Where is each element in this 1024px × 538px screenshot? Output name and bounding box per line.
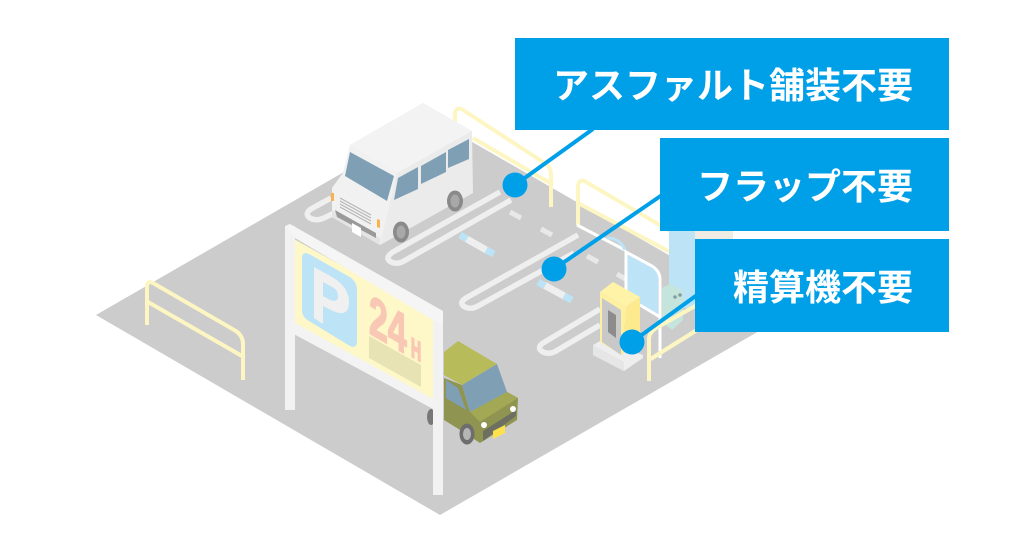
parking space lines — [307, 192, 600, 353]
leader: asphalt — [502, 129, 593, 198]
callout: no flap: フラップ不要 — [697, 166, 913, 207]
car front wheel — [460, 424, 474, 444]
sign info plate — [369, 336, 421, 387]
callout: no asphalt paving: アスファルト舗装不要 — [553, 65, 913, 106]
parking markers — [510, 212, 627, 280]
van windshield — [345, 152, 394, 201]
leader: flap — [542, 195, 662, 282]
rear railing left — [455, 109, 551, 207]
wheel stop lower — [538, 282, 572, 300]
callout leader lines and dots — [502, 129, 697, 354]
sign text: 24H: H — [411, 332, 421, 368]
parking P icon — [302, 253, 357, 347]
sign posts and frame — [285, 224, 443, 495]
car windshield — [462, 364, 507, 412]
white van — [331, 103, 473, 245]
green car — [427, 341, 518, 444]
teal equipment box — [662, 284, 683, 330]
parking signboard — [285, 224, 443, 495]
van side windows — [394, 139, 469, 200]
parking lot ground — [96, 120, 780, 515]
van grille and bumper — [331, 193, 380, 238]
sign text: 24H: 24 — [369, 283, 407, 367]
van wheels — [393, 190, 463, 242]
pay station machine — [593, 282, 643, 371]
callout: no pay station: 精算機不要 — [733, 267, 913, 308]
callout: no asphalt paving — [515, 38, 949, 130]
callout: no pay station — [695, 239, 949, 332]
building behind callouts — [669, 228, 733, 308]
car plate — [493, 425, 505, 439]
front right railing — [649, 305, 697, 381]
callout: no flap — [660, 138, 949, 231]
rear railing right — [578, 181, 670, 252]
gate: flap barrier — [577, 225, 660, 358]
car side window — [446, 380, 466, 410]
wheel stop upper — [460, 235, 494, 254]
front left railing — [147, 282, 243, 380]
leader: pay station — [620, 295, 697, 354]
